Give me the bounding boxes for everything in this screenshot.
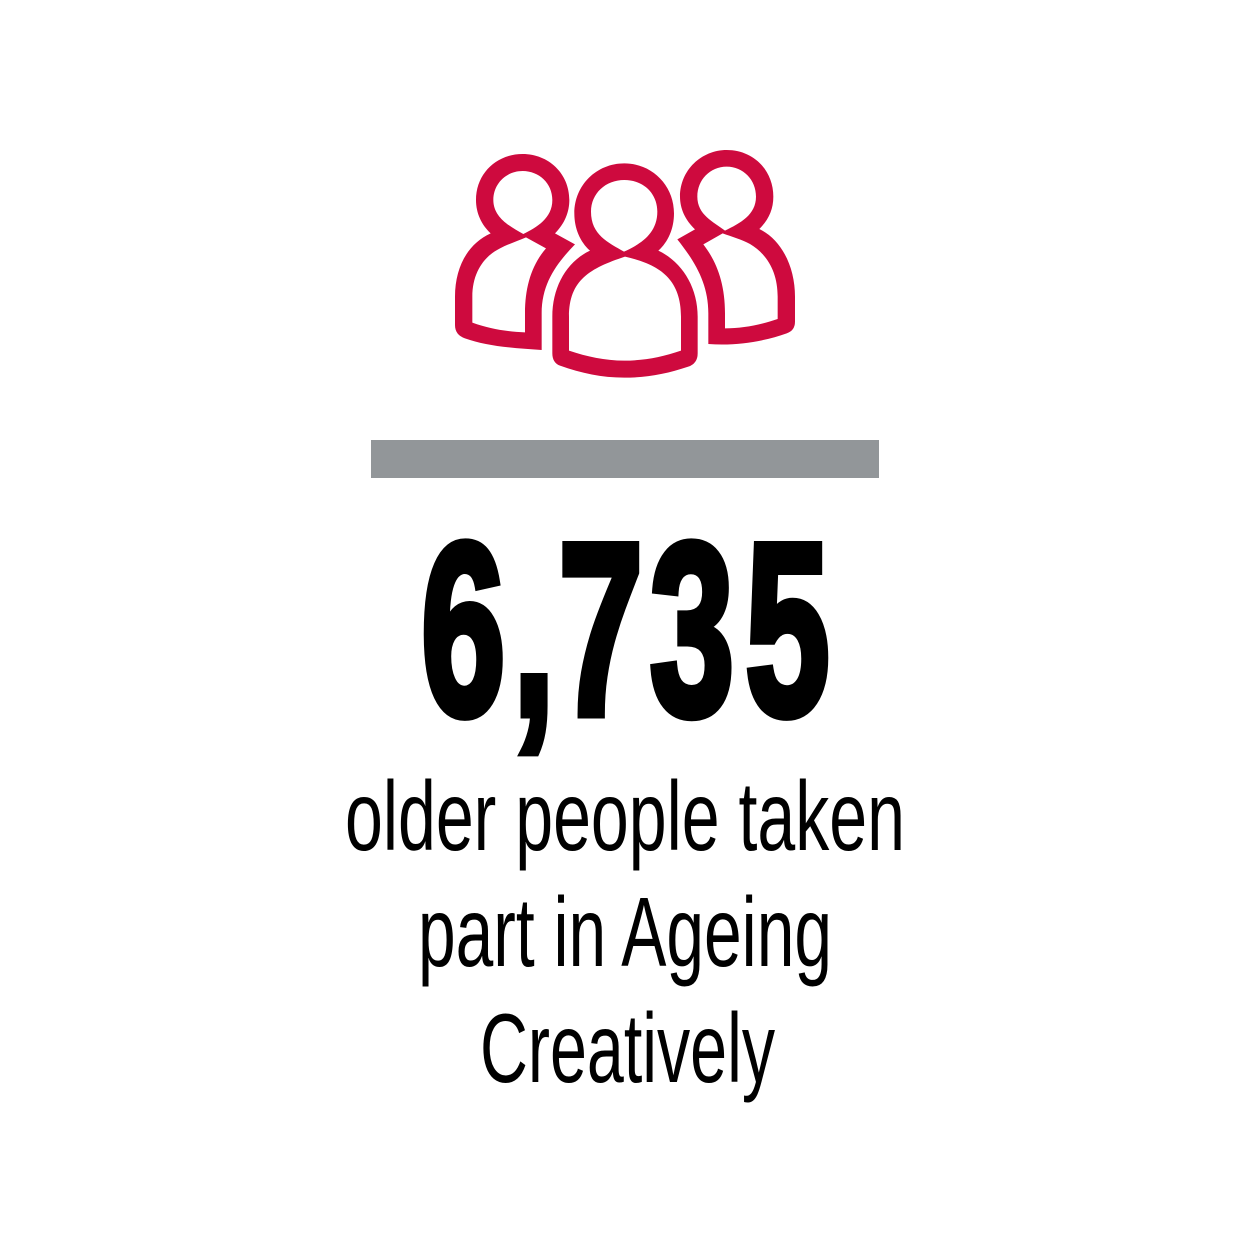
icon: left person <box>455 154 575 350</box>
icon: right person <box>677 150 795 344</box>
caption <box>345 761 905 1103</box>
icon: centre person <box>552 163 698 378</box>
icon: three people <box>455 150 795 378</box>
big number: 6,735 <box>421 493 830 767</box>
caption line 2: part in Ageing <box>418 877 832 987</box>
caption line 3: Creatively <box>480 993 775 1103</box>
grey divider bar <box>371 440 879 478</box>
caption line 1: older people taken <box>345 761 905 871</box>
